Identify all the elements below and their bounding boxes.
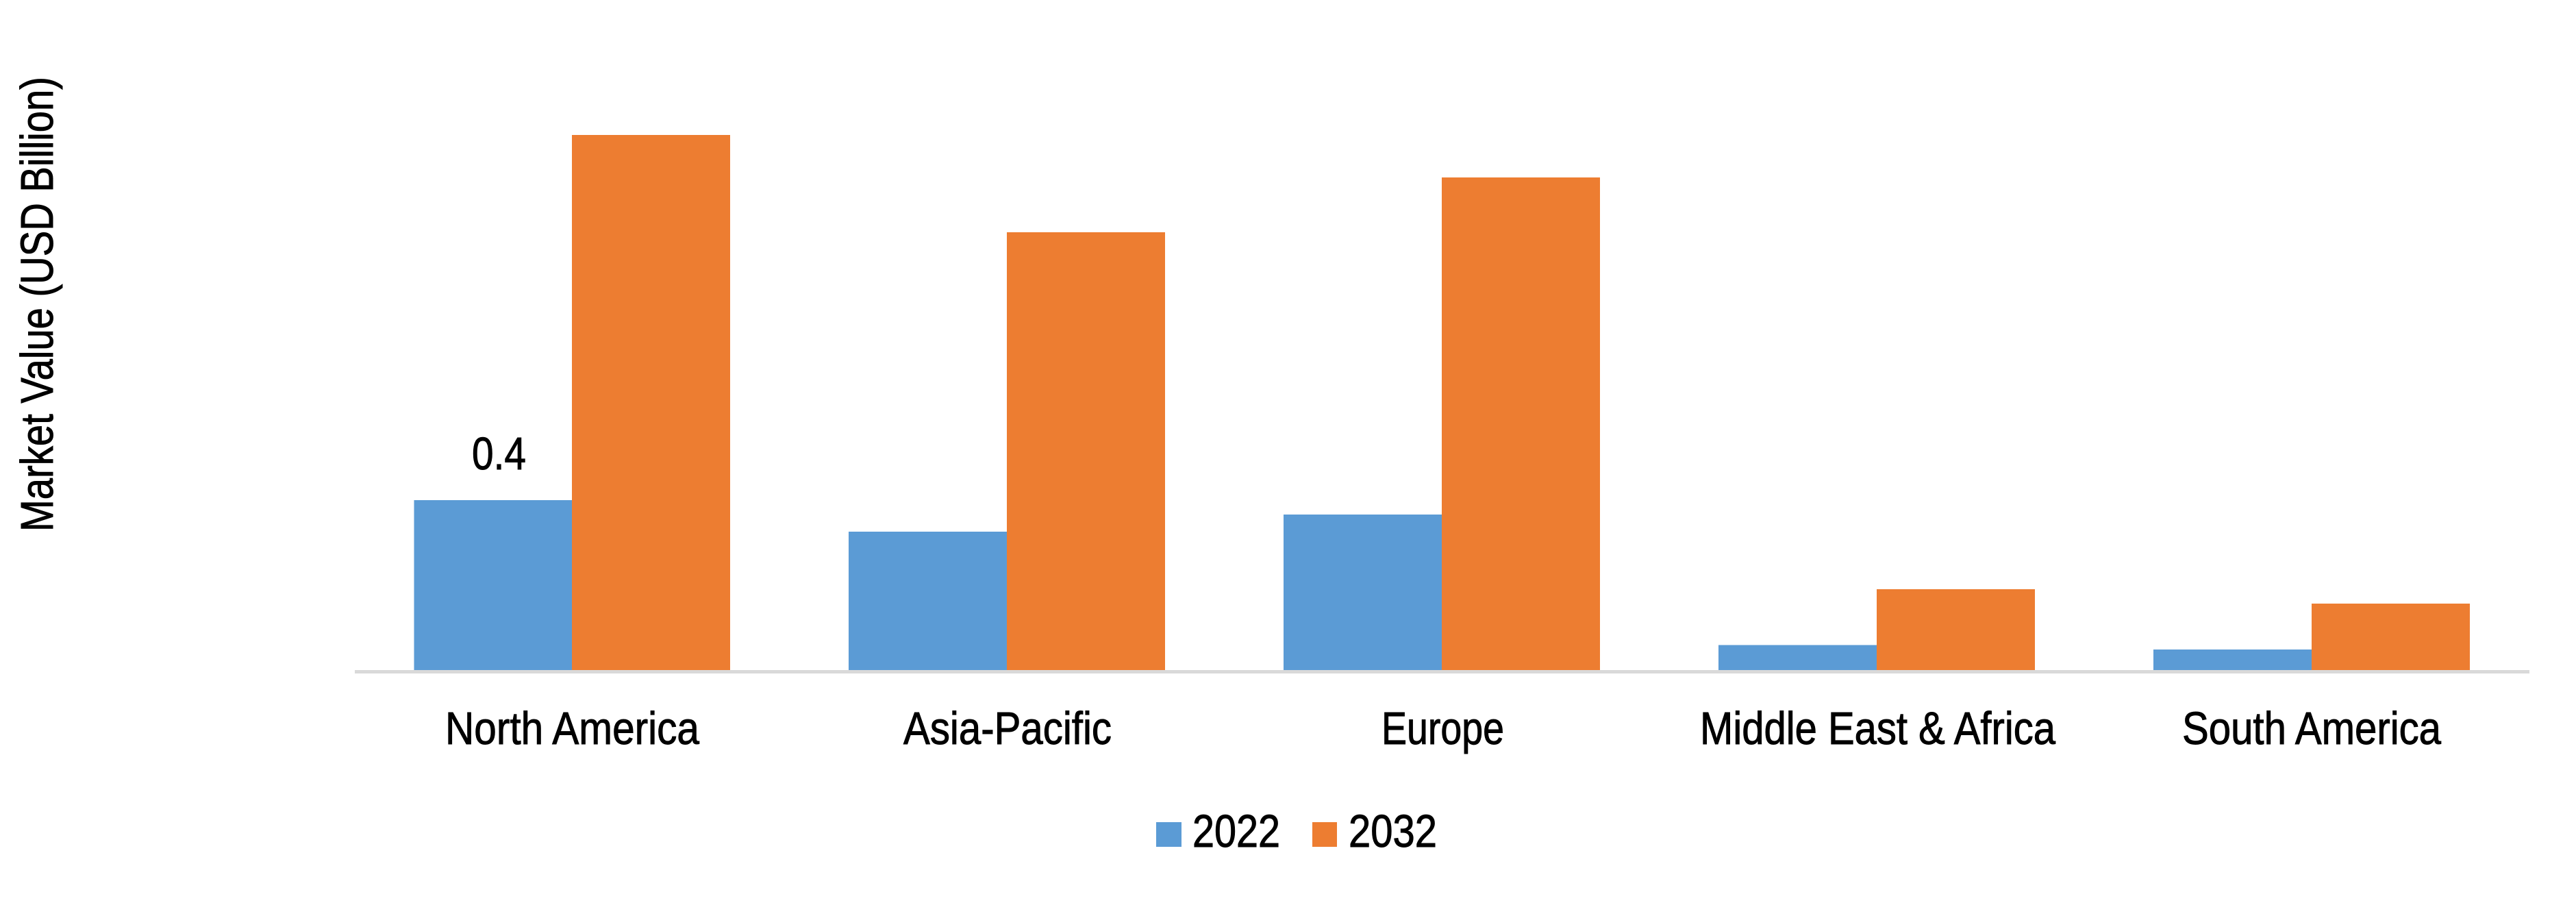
bar: Asia-Pacific 2022 [849,532,1007,670]
data label: 0.4: 0.4 [472,428,526,480]
y-axis title: Market Value (USD Billion) [12,77,63,532]
legend swatch: 2022 [1156,822,1181,847]
bar: North America 2032 [572,135,730,670]
group: Asia-Pacific [849,232,1165,754]
group: Middle East & Africa [1700,589,2056,754]
category label: Europe: Europe [1381,703,1504,754]
legend label: 2022: 2022 [1192,806,1280,857]
bar: South America 2022 [2153,650,2312,670]
legend swatch: 2032 [1312,822,1337,847]
bar: North America 2022 [414,500,572,670]
bar: Middle East & Africa 2032 [1877,589,2035,670]
legend label: 2032: 2032 [1349,806,1437,857]
group: Europe [1284,177,1600,754]
bar: Europe 2022 [1284,515,1442,670]
group: South America [2153,604,2470,754]
bar: Middle East & Africa 2022 [1718,645,1877,670]
bar: Europe 2032 [1442,177,1600,670]
category label: Asia-Pacific: Asia-Pacific [903,703,1112,754]
legend [1156,806,1437,857]
category label: South America: South America [2182,703,2442,754]
x-axis line [355,670,2529,673]
group: North America [414,135,730,754]
bar: South America 2032 [2312,604,2470,670]
category label: North America: North America [445,703,700,754]
category label: Middle East & Africa: Middle East & Africa [1700,703,2056,754]
bar: Asia-Pacific 2032 [1007,232,1165,670]
